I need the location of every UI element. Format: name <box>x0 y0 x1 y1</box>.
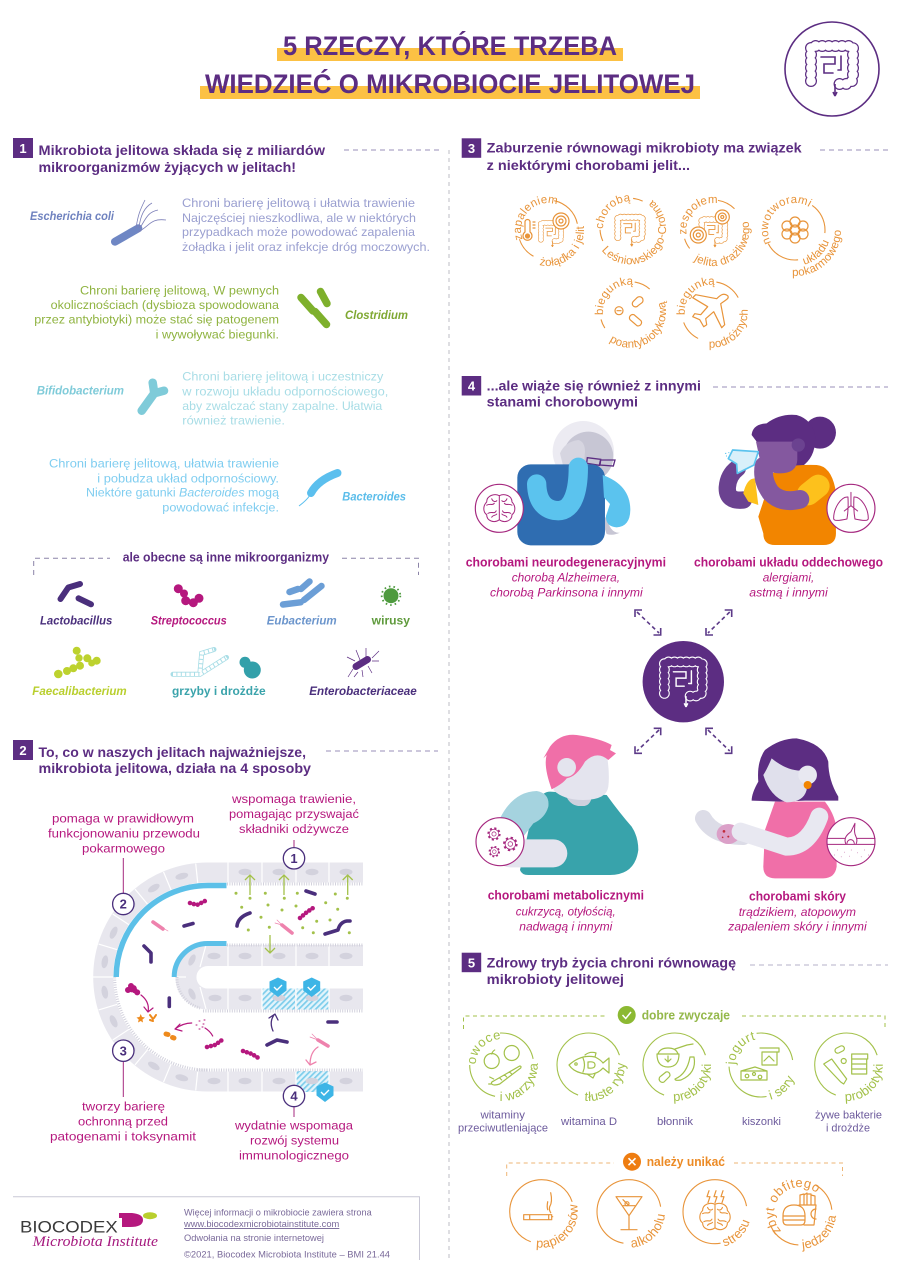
label: neurodegenerative: chorobą Parkinsona i innymi <box>490 586 644 600</box>
heading 1 <box>13 138 440 175</box>
label: respiratory: astmą i innymi <box>749 586 829 600</box>
numbered markers: 3 <box>120 1043 127 1058</box>
good habits header <box>464 1006 885 1029</box>
habit captions: żywe bakterie <box>815 1109 882 1121</box>
label 1: składniki odżywcze <box>239 822 349 836</box>
ring: zespół jelita drażliwego: zespołem <box>680 196 717 234</box>
ring: jogurt i sery <box>726 1032 795 1100</box>
other microorganisms: ale obecne są inne mikroorganizmy <box>123 551 329 565</box>
Bacteroides: Chroni barierę jelitową, ułatwia trawienie <box>49 457 279 471</box>
bacteria in lumen <box>128 891 350 1065</box>
figure: woman with skin condition <box>703 738 875 878</box>
heading 1: 1 <box>19 141 27 156</box>
logo: Microbiota Institute <box>32 1234 158 1250</box>
Clostridium: przez antybiotyki) może stać się patogenem <box>34 313 279 327</box>
icon: lungs <box>827 484 875 532</box>
ring: zapaleniem żołądka i jelit: zapaleniem <box>514 196 558 240</box>
heading 5: mikrobioty jelitowej <box>487 971 624 987</box>
ring: papierosów: papierosów <box>536 1204 578 1250</box>
ring: probiotyki <box>814 1032 883 1104</box>
ring: prebiotyki <box>642 1032 711 1104</box>
figure: elderly man (neurodegenerative) <box>475 421 630 545</box>
ring: biegunka poantybiotykowa: poantybiotykową <box>608 300 668 350</box>
figure: woman sneezing (respiratory) <box>725 415 875 545</box>
footer text: ©2021, Biocodex Microbiota Institute – BMI 21.44 <box>184 1250 390 1261</box>
ring: choroba Leśniowskiego-Crohna: chorobą <box>596 195 631 228</box>
Bifidobacterium: Chroni barierę jelitową i uczestniczy <box>182 370 384 384</box>
Bacteroides: Bacteroides <box>342 490 406 504</box>
title: WIEDZIEĆ O MIKROBIOCIE JELITOWEJ <box>205 68 695 99</box>
heading 1: Mikrobiota jelitowa składa się z miliardów <box>38 142 325 158</box>
label 3 <box>50 1100 197 1144</box>
ring: jogurt i sery: i sery <box>768 1075 795 1100</box>
Clostridium: Clostridium <box>345 308 408 322</box>
Lactobacillus <box>40 584 113 627</box>
heading 5: 5 <box>468 956 475 970</box>
Eubacterium <box>267 582 337 627</box>
label 2: pokarmowego <box>82 842 165 856</box>
avoid header: należy unikać <box>647 1155 725 1169</box>
ring: owoce i warzywa: i warzywa <box>500 1063 538 1101</box>
heading 4: ...ale wiąże się również z innymi <box>487 378 701 394</box>
label: metabolic <box>488 888 644 934</box>
Streptococcus: Streptococcus <box>151 613 227 627</box>
label 2: pomaga w prawidłowym <box>52 812 194 826</box>
heading 2: 2 <box>19 743 27 758</box>
label 2: funkcjonowaniu przewodu <box>48 827 200 841</box>
figure: overweight man (metabolic) <box>476 735 638 875</box>
Bifidobacterium: Bifidobacterium <box>37 383 124 397</box>
heading 3: 3 <box>468 141 475 156</box>
heading 4: stanami chorobowymi <box>487 394 638 410</box>
ring: tłuste ryby <box>556 1032 628 1101</box>
habit captions: kiszonki <box>742 1116 781 1128</box>
ring: biegunka poantybiotykowa: biegunką <box>594 278 634 314</box>
connector lines <box>123 840 294 1117</box>
Enterobacteriaceae: Enterobacteriaceae <box>309 684 417 698</box>
ring: biegunka podróżnych <box>676 278 748 350</box>
ring: alkoholu: alkoholu <box>631 1214 665 1248</box>
Bifidobacterium: w rozwoju układu odpornościowego, <box>181 384 388 398</box>
panel 3: intestinal diseases <box>462 138 888 350</box>
Bifidobacterium: aby zwalczać stany zapalne. Ułatwia <box>182 399 382 413</box>
label: skin: trądzikiem, atopowym <box>739 905 856 919</box>
label 1: wspomaga trawienie, <box>231 792 356 806</box>
other microorganisms <box>32 551 419 698</box>
numbered markers: 1 <box>290 851 298 866</box>
icon: central gut <box>643 641 724 722</box>
label: neurodegenerative <box>466 556 666 600</box>
label: metabolic: cukrzycą, otyłością, <box>516 904 616 918</box>
Faecalibacterium <box>32 647 127 698</box>
footer <box>13 1197 420 1261</box>
panel 5: healthy lifestyle <box>458 952 888 1252</box>
ring: zapaleniem żołądka i jelit <box>514 196 584 266</box>
ring: zbyt obfitego jedzenia: zbyt obfitego <box>766 1180 819 1235</box>
label 4 <box>234 1118 353 1162</box>
numbered markers <box>113 848 305 1107</box>
ring: alkoholu <box>596 1179 665 1248</box>
Lactobacillus: Lactobacillus <box>40 613 113 627</box>
Escherichia coli: Escherichia coli <box>30 209 115 223</box>
ring: zbyt obfitego jedzenia: jedzenia <box>802 1216 836 1252</box>
label: metabolic: nadwagą i innymi <box>519 920 614 934</box>
ring: papierosów <box>509 1179 578 1250</box>
ring: owoce i warzywa: owoce <box>469 1032 500 1064</box>
ring: biegunka poantybiotykowa <box>594 278 668 350</box>
heading 4: 4 <box>468 378 476 394</box>
arrows: gut to diseases <box>635 610 732 753</box>
icon: intestine badge <box>785 22 879 116</box>
habit captions: witaminy <box>479 1109 526 1121</box>
heading 3: Zaburzenie równowagi mikrobioty ma związek <box>487 140 802 156</box>
Clostridium: okolicznościach (dysbioza spowodowana <box>51 298 279 312</box>
ring: stresu: stresu <box>723 1220 750 1246</box>
ring: nowotwory układu pokarmowego: układu <box>802 240 829 264</box>
habit captions: witamina D <box>560 1116 617 1128</box>
ring: zbyt obfitego jedzenia <box>766 1180 836 1252</box>
Bacteroides <box>49 457 406 514</box>
nutrient dots and arrows <box>234 875 353 953</box>
Streptococcus <box>151 584 227 627</box>
ring: biegunka podróżnych: biegunką <box>676 278 715 314</box>
habit captions: i drożdże <box>826 1123 870 1135</box>
Bacteroides: i pobudza układ odpornościowy. <box>97 471 279 485</box>
ring: nowotwory układu pokarmowego <box>762 196 842 278</box>
grzyby i drożdże: grzyby i drożdże <box>172 684 266 698</box>
Clostridium: Chroni barierę jelitową, W pewnych <box>80 283 279 297</box>
wirusy <box>371 586 410 627</box>
ring: zespół jelita drażliwego <box>680 196 752 266</box>
title <box>200 30 700 99</box>
Eubacterium: Eubacterium <box>267 613 337 627</box>
ring: biegunka podróżnych: podróżnych <box>710 310 748 350</box>
label 1: pomagając przyswajać <box>229 807 359 821</box>
label 4: immunologicznego <box>239 1148 349 1162</box>
Clostridium: i wywoływać biegunki. <box>156 327 279 341</box>
label 1 <box>229 792 359 836</box>
footer text: www.biocodexmicrobiotainstitute.com <box>183 1219 339 1230</box>
grzyby i drożdże <box>172 650 266 698</box>
label 2 <box>48 812 200 856</box>
label 3: patogenami i toksynamit <box>50 1130 197 1144</box>
label 3: ochronną przed <box>78 1115 168 1129</box>
ring: jogurt i sery: jogurt <box>726 1032 756 1066</box>
label: neurodegenerative: chorobą Alzheimera, <box>512 571 620 585</box>
ring: tłuste ryby: tłuste ryby <box>584 1062 628 1101</box>
numbered markers: 4 <box>290 1089 298 1104</box>
title: 5 RZECZY, KTÓRE TRZEBA <box>283 30 617 61</box>
ring: nowotwory układu pokarmowego: nowotworami <box>762 196 812 244</box>
label 4: rozwój systemu <box>250 1133 339 1147</box>
heading 2 <box>13 740 438 776</box>
Enterobacteriaceae <box>309 648 417 698</box>
habit captions: przeciwutleniające <box>458 1123 548 1135</box>
icon: brain <box>475 484 523 532</box>
icon: skin follicle <box>827 818 875 866</box>
label: neurodegenerative: chorobami neurodegeneracyjnymi <box>466 556 666 570</box>
numbered markers: 2 <box>120 897 127 912</box>
heading 3 <box>462 138 888 173</box>
ring: stresu <box>682 1179 750 1246</box>
Bifidobacterium <box>37 370 388 427</box>
label: skin: zapaleniem skóry i innymi <box>727 920 868 934</box>
logo <box>20 1212 158 1250</box>
ring: nowotwory układu pokarmowego: pokarmowego <box>792 230 842 278</box>
label: skin: chorobami skóry <box>749 890 846 904</box>
Escherichia coli: żołądka i jelit oraz infekcje dróg moczowych. <box>182 240 430 254</box>
label: skin <box>727 890 868 934</box>
Escherichia coli <box>30 196 430 254</box>
heading 4 <box>462 376 888 410</box>
gut wall diagram <box>93 840 363 1117</box>
Faecalibacterium: Faecalibacterium <box>32 684 127 698</box>
panel 4: other conditions <box>462 376 888 934</box>
good habits header: dobre zwyczaje <box>642 1008 730 1022</box>
panel 2: four functions of microbiota <box>13 740 438 1162</box>
Escherichia coli: Najczęściej nieszkodliwa, ale w niektórych <box>182 211 416 225</box>
Escherichia coli: Chroni barierę jelitową i ułatwia trawienie <box>182 196 415 210</box>
Clostridium <box>34 283 408 341</box>
label: respiratory: alergiami, <box>763 571 814 585</box>
label 4: wydatnie wspomaga <box>234 1118 353 1132</box>
ring: owoce i warzywa <box>469 1032 538 1101</box>
wirusy: wirusy <box>371 613 410 627</box>
heading 5 <box>462 953 888 987</box>
Bacteroides: Niektóre gatunki Bacteroides mogą <box>86 486 279 500</box>
habit captions <box>458 1109 882 1135</box>
Escherichia coli: przypadkach może powodować zapalenia <box>182 225 415 239</box>
label: respiratory <box>694 556 883 600</box>
ring: probiotyki: probiotyki <box>845 1064 883 1104</box>
panel 1: microbiota composition <box>13 138 440 698</box>
Bacteroides: powodować infekcje. <box>162 500 279 514</box>
ring: zespół jelita drażliwego: jelita drażliwego <box>692 222 752 266</box>
heading 3: z niektórymi chorobami jelit... <box>487 157 690 173</box>
label: respiratory: chorobami układu oddechowego <box>694 556 883 570</box>
Bifidobacterium: również trawienie. <box>182 413 285 427</box>
heading 1: mikroorganizmów żyjących w jelitach! <box>38 159 296 175</box>
label: metabolic: chorobami metabolicznymi <box>488 888 644 902</box>
ring: prebiotyki: prebiotyki <box>674 1064 711 1104</box>
habit captions: błonnik <box>657 1116 694 1128</box>
footer text: Odwołania na stronie internetowej <box>184 1233 324 1244</box>
shields <box>270 978 334 1102</box>
avoid header <box>507 1153 842 1176</box>
logo: BIOCODEX <box>20 1217 118 1236</box>
heading 2: mikrobiota jelitowa, działa na 4 sposoby <box>38 760 311 776</box>
heading 2: To, co w naszych jelitach najważniejsze, <box>38 744 306 760</box>
heading 5: Zdrowy tryb życia chroni równowagę <box>487 954 736 970</box>
icon: gears <box>476 818 524 866</box>
footer text <box>183 1208 390 1261</box>
footer text: Więcej informacji o mikrobiocie zawiera strona <box>184 1208 372 1219</box>
ring: choroba Leśniowskiego-Crohna: Leśniowskiego-Crohna <box>602 200 666 264</box>
ring: zapaleniem żołądka i jelit: żołądka i jelit <box>540 226 584 266</box>
label 3: tworzy barierę <box>82 1100 165 1114</box>
